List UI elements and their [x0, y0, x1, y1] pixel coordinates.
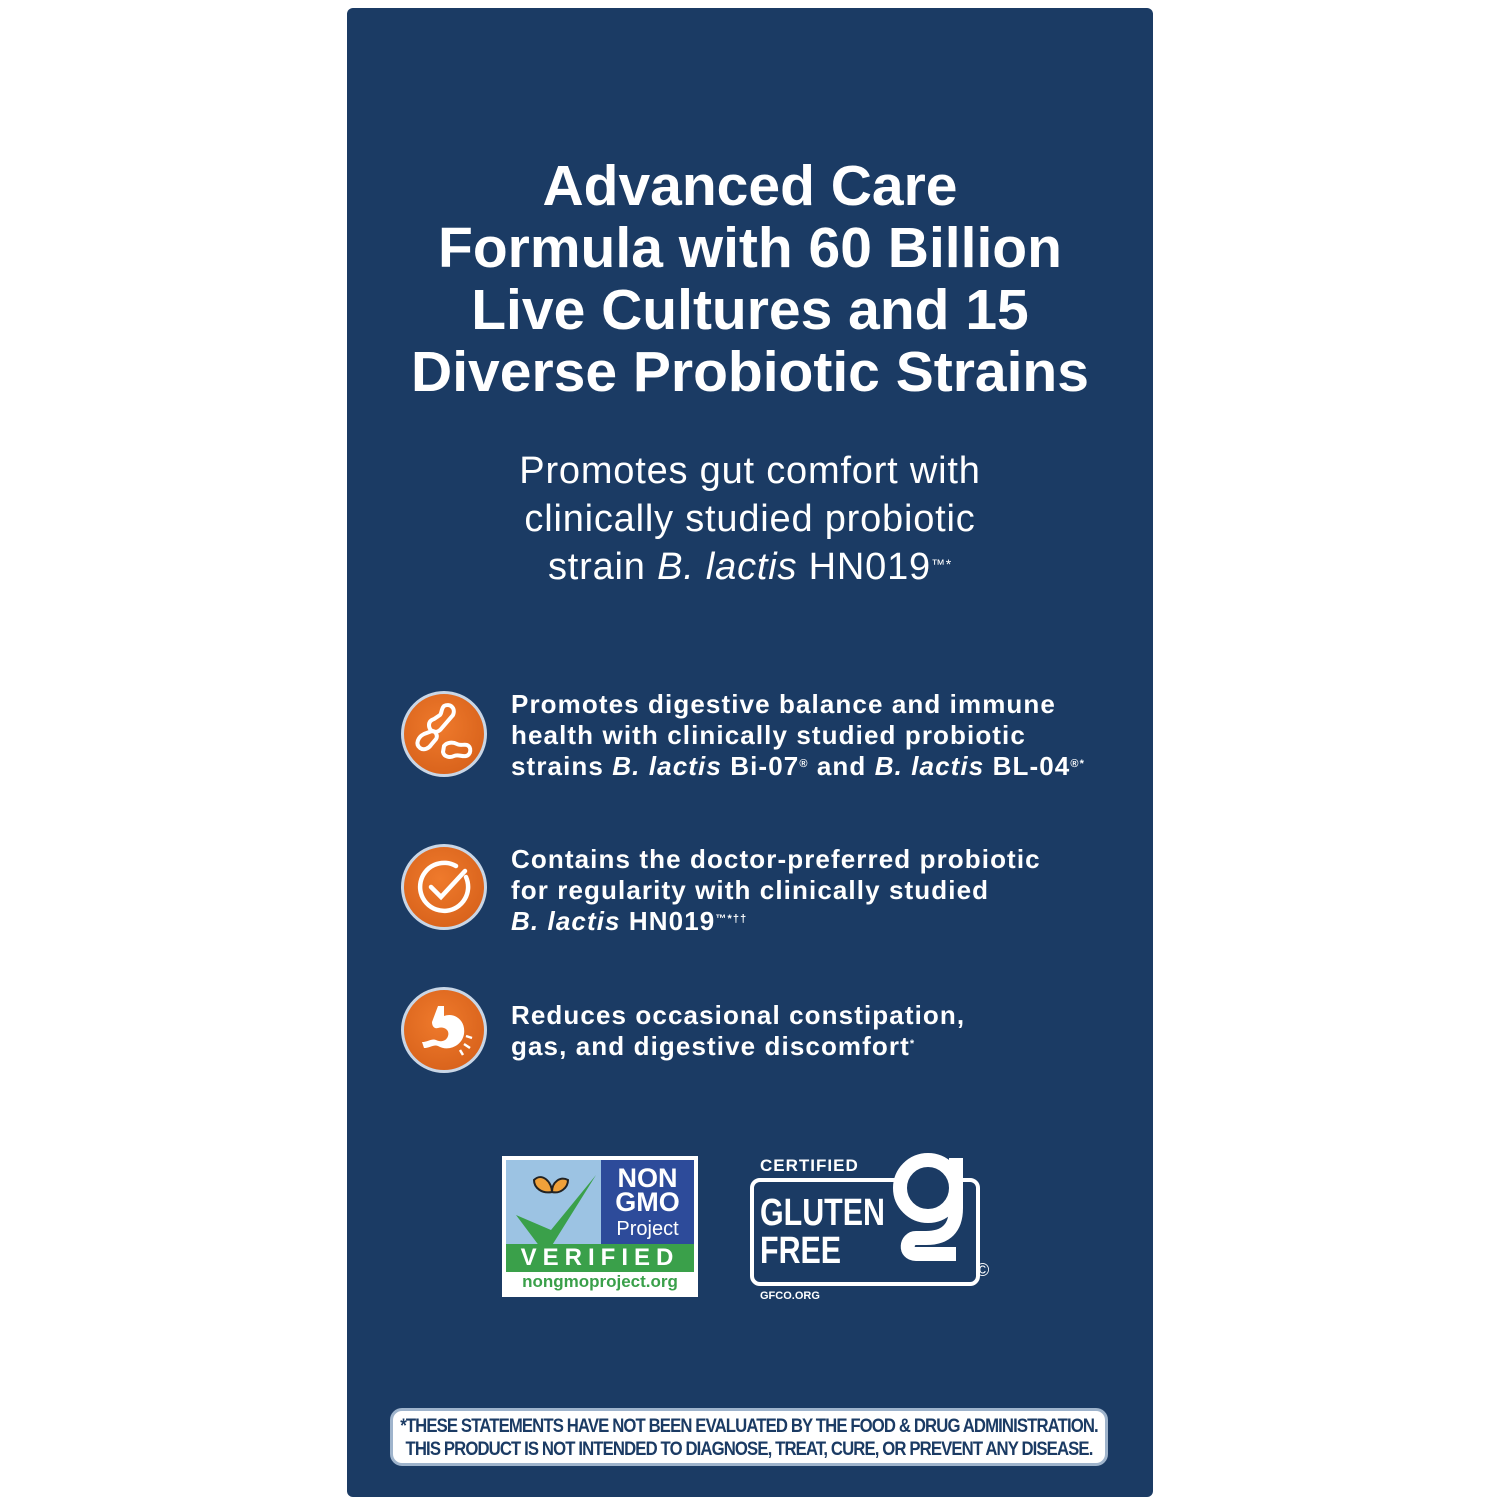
logo: Non GMO verified: nongmoproject.org [522, 1272, 678, 1291]
bullet 1 text: strains B. lactis Bi-07® and B. lactis BL-04®* [511, 751, 1085, 781]
bullet 3 text: gas, and digestive discomfort* [511, 1031, 915, 1061]
bullet 3 text [511, 1000, 965, 1061]
logo: Non GMO verified: VERIFIED [521, 1244, 679, 1271]
bullet 1 text: health with clinically studied probiotic [511, 720, 1026, 750]
disclaimer box [390, 1408, 1108, 1466]
title: Advanced Care [542, 154, 958, 218]
disclaimer box: THIS PRODUCT IS NOT INTENDED TO DIAGNOSE, TREAT, CURE, OR PREVENT ANY DISEASE. [406, 1439, 1092, 1460]
logo: certified gluten free [750, 1153, 989, 1302]
subtitle: Promotes gut comfort with [519, 450, 981, 492]
logo: certified gluten free: CERTIFIED [760, 1156, 859, 1175]
icon: stomach [401, 987, 487, 1073]
logo: certified gluten free: GLUTEN [760, 1192, 885, 1234]
bullet 1 text: Promotes digestive balance and immune [511, 689, 1056, 719]
icon: probiotic cells [401, 691, 487, 777]
bullet 2 text: B. lactis HN019™*†† [511, 906, 747, 936]
title: Live Cultures and 15 [471, 278, 1029, 342]
logo: certified gluten free: © [976, 1260, 989, 1280]
bullet 1 text [511, 689, 1085, 781]
title [411, 154, 1089, 404]
subtitle [519, 450, 981, 588]
disclaimer box: *THESE STATEMENTS HAVE NOT BEEN EVALUATED BY THE FOOD & DRUG ADMINISTRATION. [400, 1416, 1098, 1437]
bullet 2 text: Contains the doctor-preferred probiotic [511, 844, 1041, 874]
bullet 2 text: for regularity with clinically studied [511, 875, 989, 905]
title: Formula with 60 Billion [438, 216, 1062, 280]
subtitle: strain B. lactis HN019™* [548, 546, 952, 588]
logo: certified gluten free: FREE [760, 1230, 841, 1272]
bullet 3 text: Reduces occasional constipation, [511, 1000, 965, 1030]
bullet 2 text [511, 844, 1041, 936]
logo: Non GMO verified: NON [618, 1163, 678, 1193]
logo: certified gluten free: GFCO.ORG [760, 1290, 820, 1302]
icon: checkmark [401, 844, 487, 930]
subtitle: clinically studied probiotic [524, 498, 976, 540]
logo: Non GMO verified: Project [616, 1218, 679, 1240]
panel: background [347, 8, 1153, 1497]
logo: Non GMO verified [502, 1156, 698, 1297]
title: Diverse Probiotic Strains [411, 340, 1089, 404]
logo: Non GMO verified: GMO [615, 1187, 680, 1217]
